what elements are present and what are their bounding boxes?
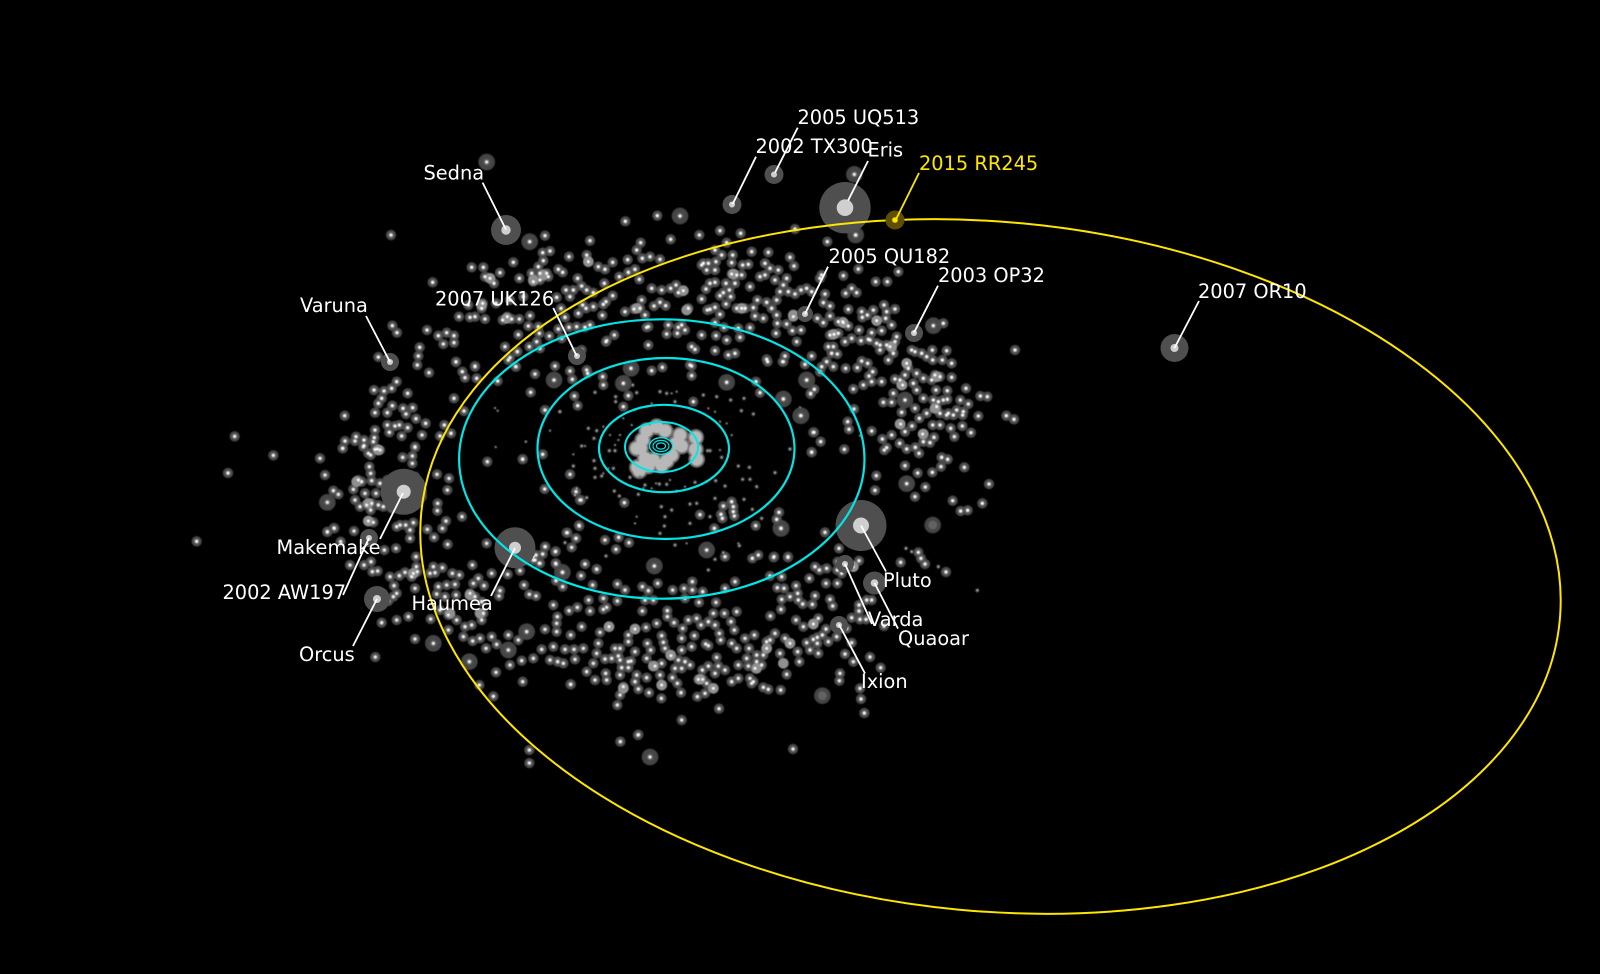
Eris [819, 182, 871, 233]
Pluto [836, 500, 886, 551]
Quaoar [863, 572, 886, 594]
label: Eris [848, 138, 903, 201]
central dark gap [650, 438, 672, 454]
label: 2003 OP32 [914, 264, 1045, 333]
label: 2005 UQ513: 2005 UQ513 [798, 106, 919, 129]
scatter of Kuiper belt objects [197, 162, 1015, 763]
2015 RR245 marker and label [886, 152, 1038, 230]
dwarf planets and large bodies [360, 165, 1188, 634]
label: 2003 OP32: 2003 OP32 [938, 264, 1045, 287]
label: Varuna: Varuna [300, 294, 368, 317]
2007 UK126 [568, 347, 586, 365]
2015 RR245 marker and label: 2015 RR245 [919, 152, 1038, 175]
label: Ixion: Ixion [861, 670, 908, 693]
Makemake [381, 469, 427, 515]
label: Varuna [300, 294, 390, 362]
label: 2002 AW197 [222, 538, 369, 604]
label: 2007 OR10: 2007 OR10 [1198, 280, 1307, 303]
2003 OP32 [905, 324, 923, 342]
label: Orcus [299, 599, 377, 666]
label: 2005 QU182 [805, 245, 950, 314]
label: 2002 TX300: 2002 TX300 [756, 135, 873, 158]
label: Ixion [839, 624, 908, 693]
Orcus [364, 586, 390, 612]
label: Pluto: Pluto [883, 569, 932, 592]
label: 2007 UK126: 2007 UK126 [435, 288, 554, 311]
orbit of 2015 RR245 [389, 170, 1592, 963]
label: Haumea: Haumea [412, 592, 493, 615]
label: Quaoar [874, 583, 969, 650]
label: Varda [845, 564, 923, 631]
label: Varda: Varda [868, 608, 923, 631]
Haumea [494, 527, 536, 568]
label: 2005 QU182: 2005 QU182 [828, 245, 950, 268]
label: Orcus: Orcus [299, 643, 355, 666]
2007 OR10 [1160, 334, 1188, 362]
label: 2002 TX300 [733, 135, 873, 204]
label: 2007 OR10 [1174, 280, 1307, 348]
label: Makemake [276, 493, 403, 559]
2002 AW197 [360, 529, 378, 547]
label: 2005 UQ513 [775, 106, 919, 173]
2005 UQ513 [764, 165, 784, 184]
2005 QU182 [797, 306, 813, 322]
Sedna [491, 215, 521, 245]
2002 TX300 [722, 195, 742, 214]
label: Haumea [412, 548, 515, 615]
Ixion [830, 616, 848, 634]
label: Makemake: Makemake [276, 536, 381, 559]
label: Sedna [424, 162, 506, 230]
Varda [836, 555, 854, 573]
planet orbits [459, 319, 864, 599]
label: Quaoar: Quaoar [898, 627, 969, 650]
label: 2007 UK126 [435, 288, 577, 356]
label: Eris: Eris [868, 138, 903, 162]
label: Pluto [861, 526, 932, 592]
Varuna [381, 353, 399, 371]
label: 2002 AW197: 2002 AW197 [222, 581, 346, 604]
label: Sedna: Sedna [424, 162, 484, 184]
